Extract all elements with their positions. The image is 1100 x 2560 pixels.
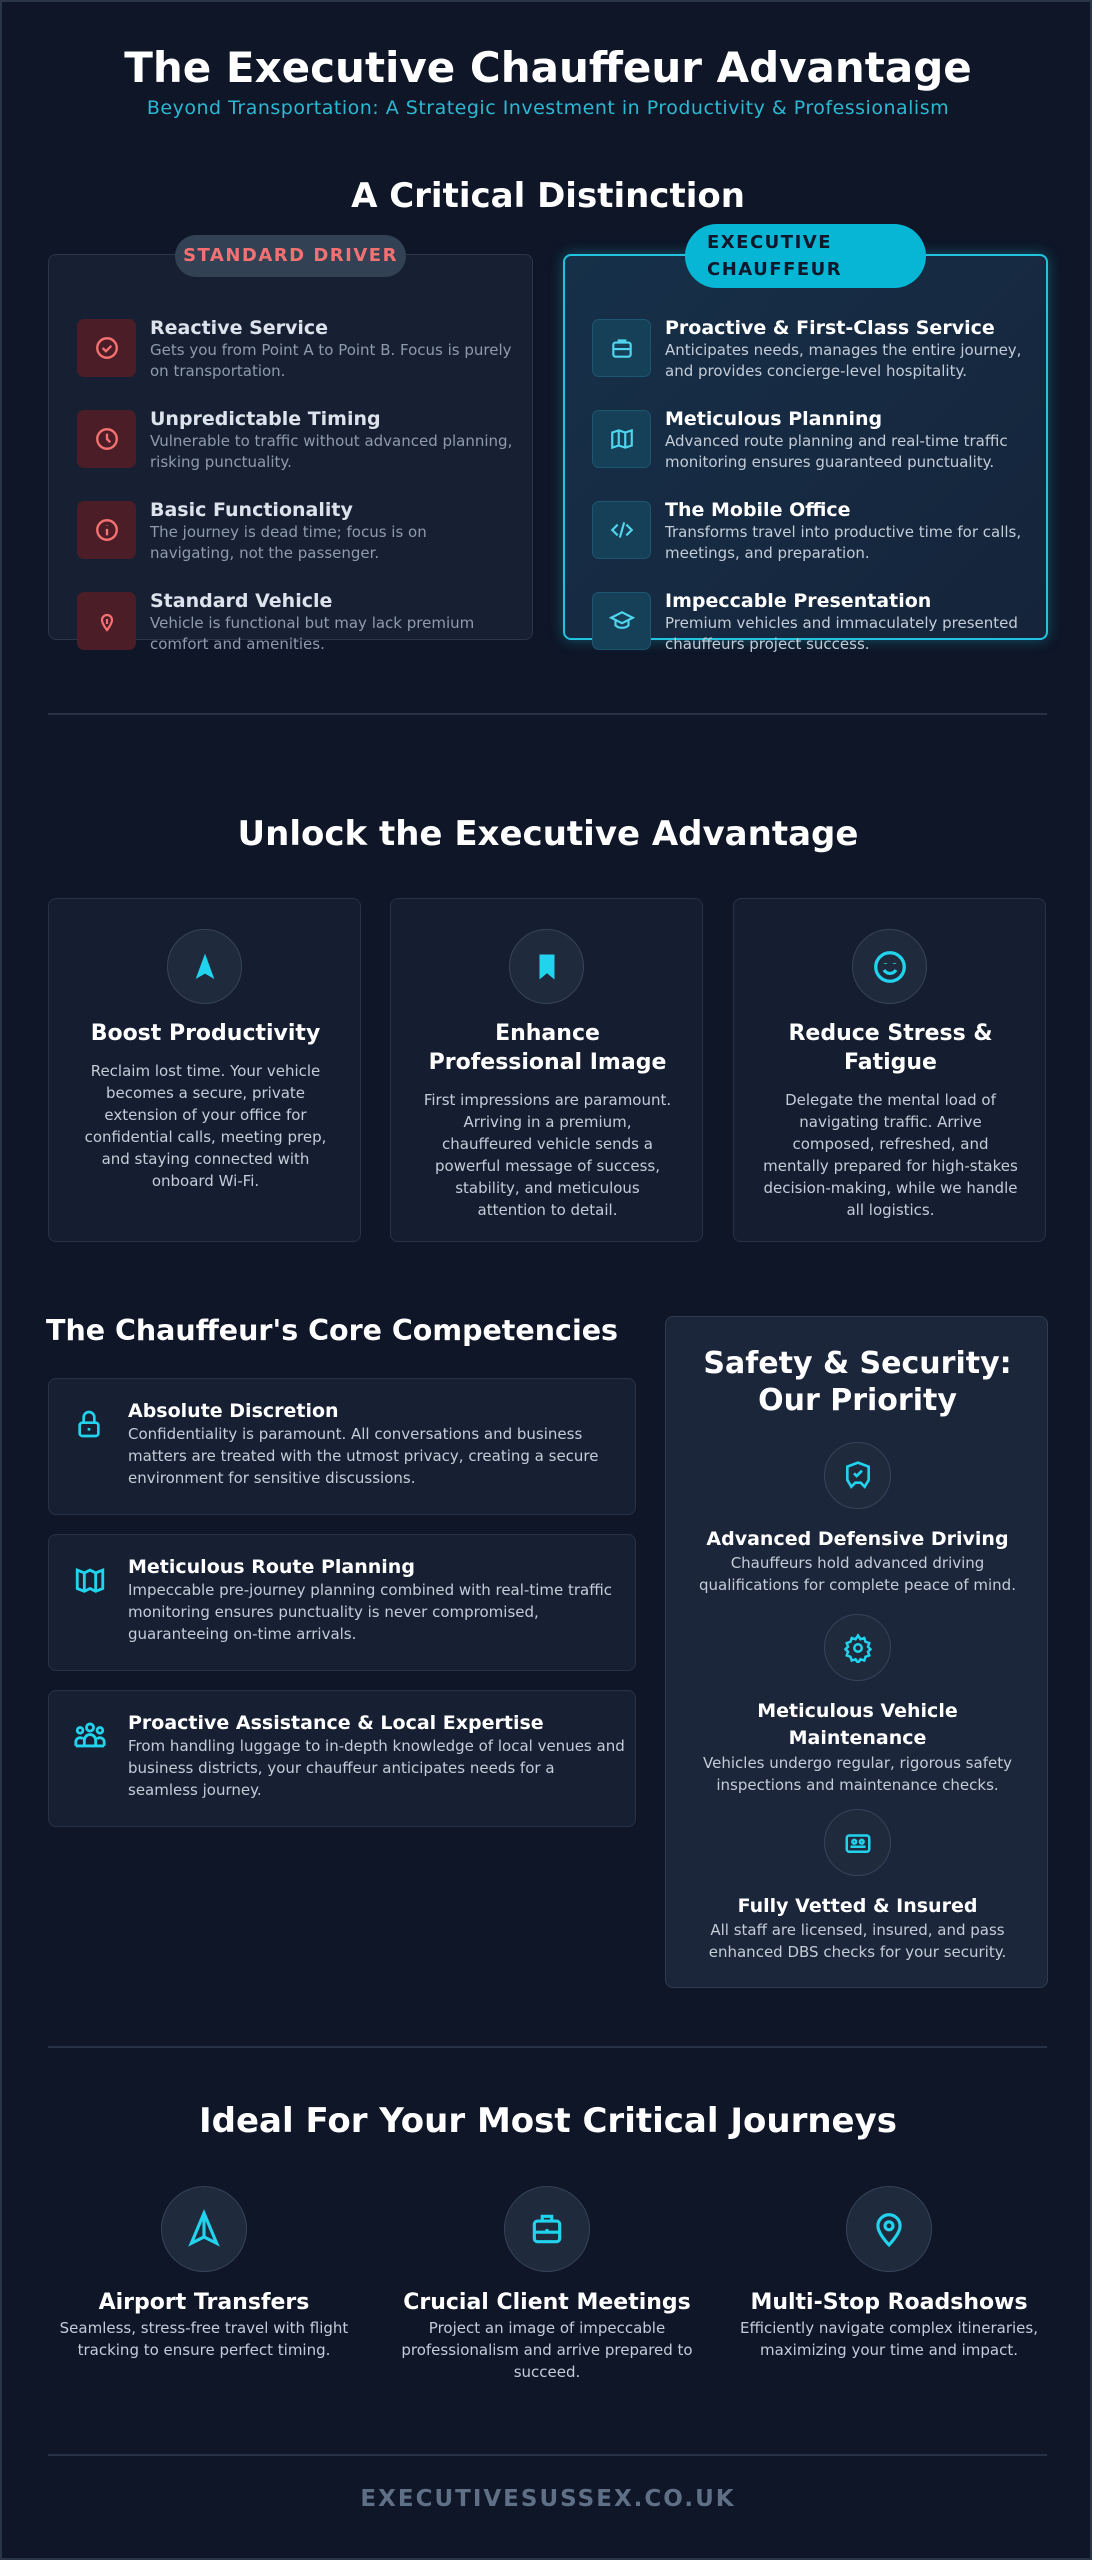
panel: safety & security: All staff are licensed, insured, and pass enhanced DBS checks for your security. [709,1921,1006,1961]
panel: safety & security: Vehicles undergo regular, rigorous safety inspections and maintenance checks. [703,1754,1012,1794]
card: enhance image: First impressions are paramount. Arriving in a premium, chauffeured vehicle sends a powerful message of success, stability, and meticulous attention to detail. [424,1091,671,1219]
item: reactive service: Reactive Service [150,317,328,339]
item: unpredictable timing: Unpredictable Timing [150,408,381,430]
card: reduce stress: Fatigue [844,1050,937,1075]
icon: briefcase [592,319,651,377]
item: impeccable presentation: chauffeurs project success. [665,635,870,653]
text: Multi-Stop Roadshows [750,2290,1028,2315]
comp card: absolute discretion: Confidentiality is paramount. All conversations and business matters are treated with the utmost privacy, creating a secure environment for sensitive discussions. [128,1425,598,1487]
label pill: standard driver: STANDARD DRIVER [183,245,398,266]
icon: map pin [846,2186,932,2272]
use case: client meetings [401,2186,693,2381]
item: proactive service: Proactive & First-Class Service [665,317,995,339]
icon: map [592,410,651,468]
item: unpredictable timing: risking punctuality. [150,453,292,471]
item: impeccable presentation: Impeccable Presentation [665,590,931,612]
item: proactive service: and provides concierge-level hospitality. [665,362,967,380]
card: reduce stress: Reduce Stress & [788,1021,993,1046]
icon: briefcase [504,2186,590,2272]
card: enhance image: Professional Image [429,1050,666,1075]
text: Airport Transfers [99,2290,309,2315]
heading: safety: Our Priority [758,1383,957,1418]
label pill: standard driver [175,235,406,277]
comp card: absolute discretion [48,1378,636,1515]
comp card: absolute discretion: Absolute Discretion [128,1400,339,1422]
use case: roadshows [740,2186,1038,2359]
heading: ideal journeys: Ideal For Your Most Critical Journeys [199,2101,897,2141]
item: mobile office: Transforms travel into productive time for calls, [665,523,1021,541]
label pill: executive chauffeur: EXECUTIVE [707,232,832,253]
item: mobile office: The Mobile Office [665,499,851,521]
item: reactive service [77,317,512,380]
icon: bookmark [509,929,584,1004]
item: mobile office: meetings, and preparation. [665,544,870,562]
icon: smile [852,929,927,1004]
text: Project an image of impeccable professionalism and arrive prepared to succeed. [401,2319,693,2381]
item: unpredictable timing: Vulnerable to traffic without advanced planning, [150,432,512,450]
card: boost productivity: Reclaim lost time. Your vehicle becomes a secure, private extension of your office for confidential calls, meeting prep, and staying connected with onboard Wi-Fi. [85,1062,326,1190]
heading: A Critical Distinction: A Critical Distinction [351,176,745,216]
icon: info [77,501,136,559]
panel: standard driver [48,254,533,640]
panel: executive chauffeur [563,254,1048,640]
label pill: executive chauffeur [685,224,926,288]
label pill: executive chauffeur: CHAUFFEUR [707,259,842,280]
card: enhance image [390,898,703,1242]
item: standard vehicle: Standard Vehicle [150,590,332,612]
item: proactive service [592,317,1021,380]
item: mobile office [592,499,1021,562]
item: meticulous planning: Meticulous Planning [665,408,882,430]
icon: book map [76,1568,104,1593]
icon: graduation cap [592,592,651,650]
icon: plane arrow [161,2186,247,2272]
comp card: route planning: Impeccable pre-journey planning combined with real-time traffic monitoring ensures punctuality is never compromised, guaranteeing on-time arrivals. [128,1581,612,1643]
panel: safety & security: Meticulous Vehicle [757,1700,958,1722]
item: meticulous planning [592,408,1008,471]
card: boost productivity [48,898,361,1242]
comp card: proactive assistance [48,1690,636,1827]
item: standard vehicle: comfort and amenities. [150,635,325,653]
card: reduce stress: Delegate the mental load of navigating traffic. Arrive composed, refreshed, and mentally prepared for high-stakes decision-making, while we handle all logistics. [763,1091,1018,1219]
panel: safety & security: Maintenance [789,1727,926,1749]
text: Seamless, stress-free travel with flight tracking to ensure perfect timing. [60,2319,348,2359]
item: vetted & insured [709,1809,1006,1961]
comp card: proactive assistance: Proactive Assistance & Local Expertise [128,1712,544,1734]
comp card: route planning [48,1534,636,1671]
icon: check circle [77,319,136,377]
icon: code [592,501,651,559]
comp card: proactive assistance: From handling luggage to in-depth knowledge of local venues and [128,1737,625,1755]
card: enhance image: Enhance [495,1021,600,1046]
icon: lock [78,1410,100,1438]
heading: safety [703,1346,1012,1418]
item: basic functionality: The journey is dead time; focus is on [150,523,427,541]
footer: website: EXECUTIVESUSSEX.CO.UK [360,2486,736,2512]
icon: gear [824,1614,891,1681]
card: reduce stress [733,898,1046,1242]
item: impeccable presentation [592,590,1018,653]
icon: id card [824,1809,891,1876]
use case: airport transfers [60,2186,348,2359]
item: reactive service: on transportation. [150,362,285,380]
item: meticulous planning: Advanced route planning and real-time traffic [665,432,1008,450]
item: meticulous planning: monitoring ensures guaranteed punctuality. [665,453,994,471]
comp card: proactive assistance: business districts, your chauffeur anticipates needs for a [128,1759,555,1777]
panel: safety & security: Advanced Defensive Driving [706,1528,1009,1550]
text: Efficiently navigate complex itineraries, maximizing your time and impact. [740,2319,1038,2359]
heading: safety: Safety & Security: [703,1346,1012,1381]
icon: navigation arrow [167,929,242,1004]
heading: core competencies: The Chauffeur's Core Competencies [46,1314,618,1347]
panel: safety & security: Fully Vetted & Insured [738,1895,977,1917]
item: standard vehicle [77,590,474,653]
heading: Unlock the Executive Advantage: Unlock the Executive Advantage [238,814,858,854]
icon: pin [77,592,136,650]
item: unpredictable timing [77,408,512,471]
item: impeccable presentation: Premium vehicles and immaculately presented [665,614,1018,632]
comp card: proactive assistance: seamless journey. [128,1781,262,1799]
panel: safety & security: Chauffeurs hold advanced driving qualifications for complete peace of mind. [699,1554,1016,1594]
comp card: route planning: Meticulous Route Planning [128,1556,415,1578]
panel: safety & security [665,1316,1048,1988]
item: proactive service: Anticipates needs, manages the entire journey, [665,341,1021,359]
title: The Executive Chauffeur Advantage [124,43,972,92]
item: standard vehicle: Vehicle is functional but may lack premium [150,614,474,632]
subtitle: Beyond Transportation: A Strategic Investment in Productivity & Professionalism [147,97,949,119]
card: boost productivity: Boost Productivity [91,1021,320,1046]
icon: clock [77,410,136,468]
item: basic functionality: navigating, not the passenger. [150,544,379,562]
item: basic functionality: Basic Functionality [150,499,353,521]
icon: shield [824,1442,891,1509]
item: defensive driving [699,1442,1016,1594]
icon: people [74,1722,106,1748]
item: reactive service: Gets you from Point A to Point B. Focus is purely [150,341,512,359]
item: basic functionality [77,499,427,562]
text: Crucial Client Meetings [403,2290,691,2315]
item: vehicle maintenance [703,1614,1012,1794]
